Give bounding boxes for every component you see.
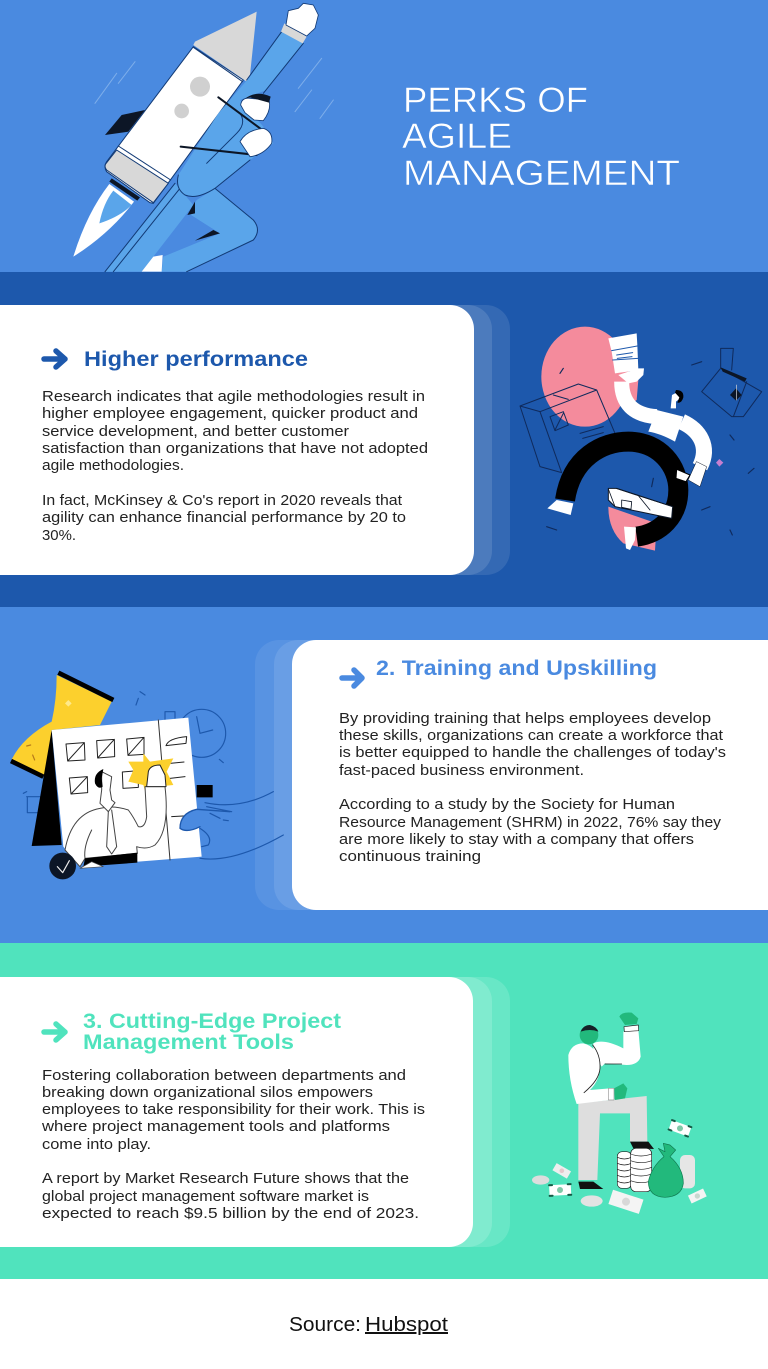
- illustration: person juggling boxes: [520, 327, 762, 551]
- text block: tools: Fostering collaboration between departments and: [42, 1068, 406, 1084]
- text block: training: [339, 711, 726, 865]
- source line: Hubspot: [365, 1314, 448, 1336]
- text block: research: Research indicates that agile methodologies result in: [42, 389, 425, 405]
- text block: research: [42, 389, 428, 544]
- heading: training and upskilling: 2. Training and Upskilling: [376, 656, 657, 680]
- text block: tools: global project management software market is: [42, 1189, 369, 1205]
- text block: tools: come into play.: [42, 1137, 151, 1153]
- title: [402, 81, 680, 193]
- panel: source footer band: [0, 1279, 768, 1369]
- title: AGILE: [402, 117, 512, 156]
- text block: training: By providing training that helps employees develop: [339, 711, 711, 727]
- icon: arrow: [342, 670, 362, 686]
- text block: research: satisfaction than organizations that have not adopted: [42, 441, 428, 457]
- text block: tools: breaking down organizational silos empowers: [42, 1085, 373, 1101]
- text block: research: higher employee engagement, quicker product and: [42, 406, 418, 422]
- text block: tools: [41, 1068, 425, 1222]
- text block: training: these skills, organizations can create a workforce that: [339, 728, 724, 744]
- illustration: man riding rocket: [73, 3, 333, 272]
- icon: arrow: [44, 351, 65, 367]
- text block: training: fast-paced business environment.: [339, 763, 584, 779]
- text block: training: are more likely to stay with a company that offers: [339, 832, 694, 848]
- text block: tools: expected to reach $9.5 billion by the end of 2023.: [42, 1206, 419, 1222]
- text block: research: agile methodologies.: [42, 458, 184, 474]
- panel: higher performance band: [0, 272, 768, 607]
- text block: tools: A report by Market Research Future shows that the: [42, 1171, 409, 1187]
- text block: research: In fact, McKinsey & Co's report in 2020 reveals that: [42, 493, 403, 509]
- panel: header background: [0, 0, 768, 272]
- source line: [289, 1314, 448, 1336]
- text block: tools: where project management tools and platforms: [41, 1119, 390, 1135]
- heading: cutting-edge project management tools: [83, 1009, 341, 1054]
- panel: training card: [255, 640, 768, 910]
- heading: cutting-edge project management tools: Management Tools: [83, 1030, 294, 1054]
- panel: tools card: [0, 977, 510, 1247]
- source line: Source:: [289, 1314, 361, 1336]
- heading: higher performance: Higher performance: [84, 347, 308, 371]
- illustration: calendar, hourglass and checklist: [11, 673, 283, 879]
- text block: research: service development, and better customer: [42, 424, 349, 440]
- illustration: man standing on coin stacks: [532, 1012, 707, 1214]
- text block: training: is better equipped to handle the challenges of today's: [339, 745, 726, 761]
- text block: research: 30%.: [42, 528, 76, 544]
- text block: training: According to a study by the Society for Human: [339, 797, 675, 813]
- icon: arrow: [44, 1024, 65, 1040]
- text block: training: continuous training: [339, 849, 481, 865]
- text block: training: Resource Management (SHRM) in 2022, 76% say they: [339, 815, 722, 831]
- title: PERKS OF: [403, 81, 588, 120]
- panel: tools band: [0, 943, 768, 1279]
- title: MANAGEMENT: [403, 154, 680, 193]
- panel: higher performance card: [0, 305, 510, 575]
- text block: tools: employees to take responsibility for their work. This is: [42, 1102, 425, 1118]
- panel: training band: [0, 607, 768, 943]
- text block: research: agility can enhance financial performance by 20 to: [42, 510, 406, 526]
- heading: cutting-edge project management tools: 3. Cutting-Edge Project: [83, 1009, 341, 1033]
